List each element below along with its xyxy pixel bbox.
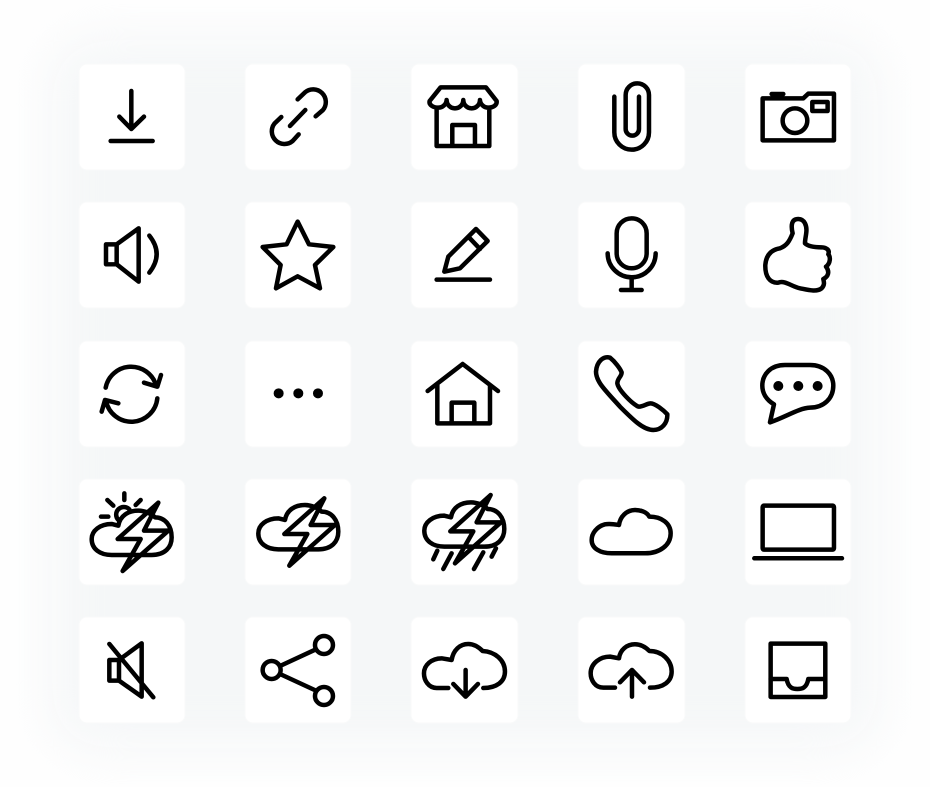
icon: house (411, 341, 518, 447)
icon: inbox tray (745, 617, 851, 723)
icon: link (245, 64, 351, 170)
icon: chat bubble (745, 341, 851, 447)
icon: muted speaker (79, 617, 185, 723)
icon: pencil (411, 202, 518, 308)
icon: thumbs up (745, 202, 851, 308)
icon: share (245, 617, 351, 723)
icon: thunder cloud (245, 479, 351, 585)
icon: thunder rain (411, 479, 518, 585)
icon: cloud (578, 479, 685, 585)
icon: microphone (578, 202, 685, 308)
soft grey background halo (52, 40, 878, 748)
icon: laptop (745, 479, 851, 585)
icon: store (411, 64, 518, 170)
icon: sun storm (79, 479, 185, 585)
icon: refresh (79, 341, 185, 447)
icon: download (79, 64, 185, 170)
icon: cloud download (411, 617, 518, 723)
icon: more dots (245, 341, 351, 447)
icon: phone (578, 341, 685, 447)
icon: camera (745, 64, 851, 170)
icon: speaker (79, 202, 185, 308)
icon: star (245, 202, 351, 308)
icon: cloud upload (578, 617, 685, 723)
icon: paperclip (578, 64, 685, 170)
